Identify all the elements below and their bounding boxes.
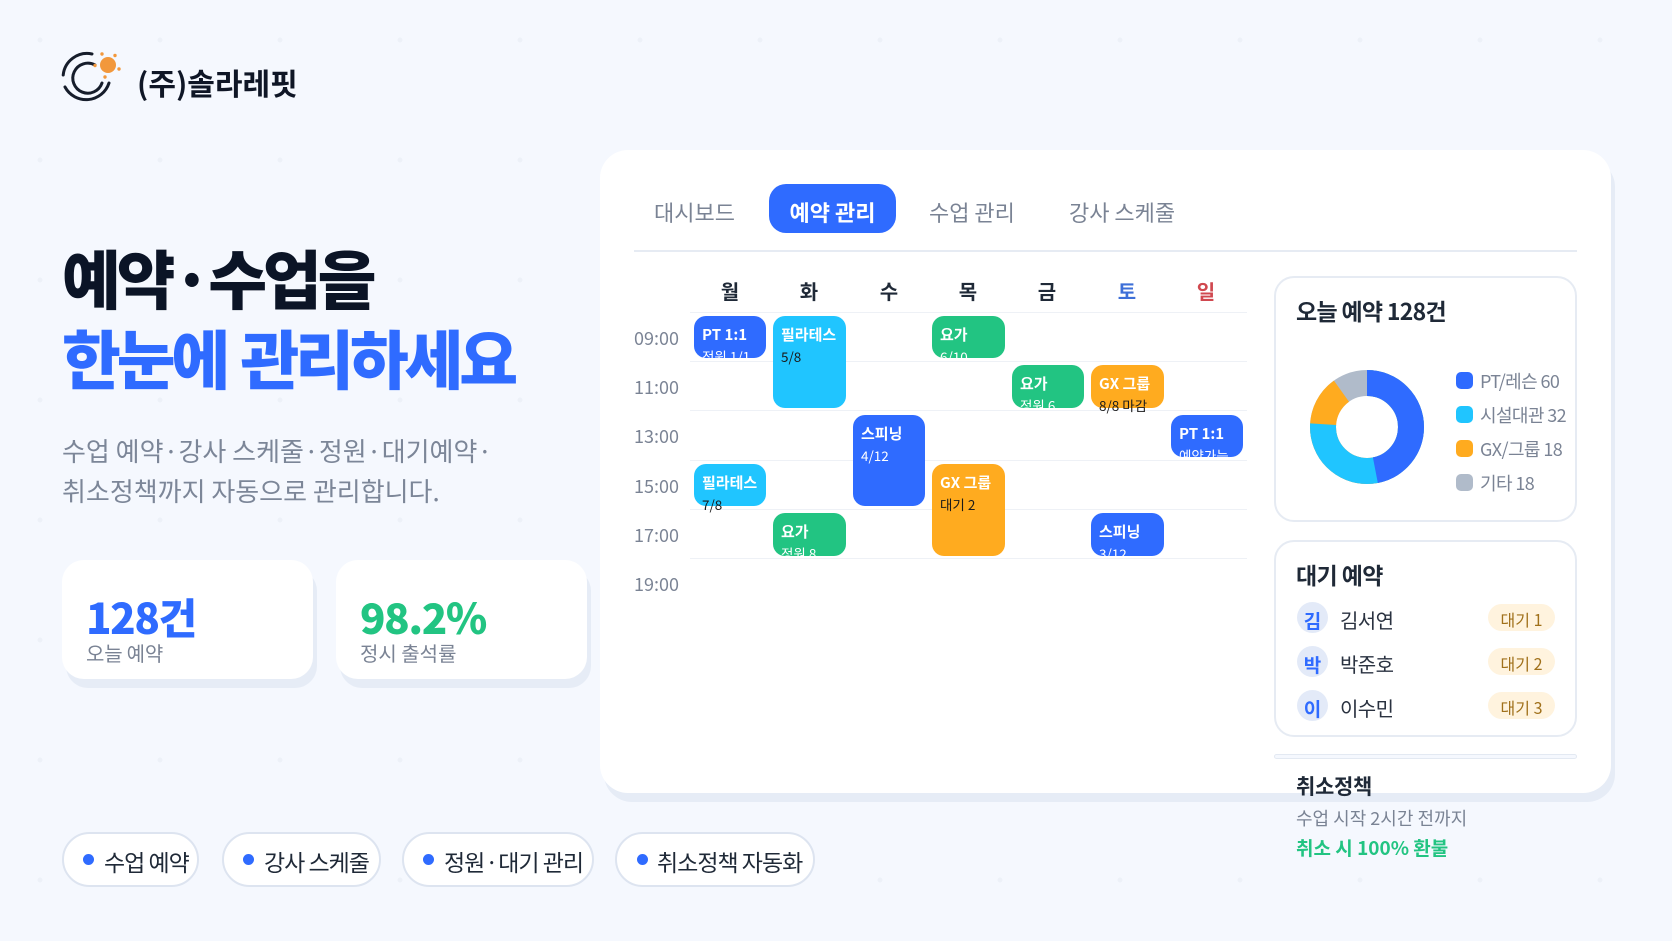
time labels bbox=[634, 325, 679, 597]
event: yoga Friday: 요가 bbox=[1020, 373, 1048, 394]
tab bar bbox=[634, 184, 1577, 252]
chip: instructor schedule: 강사 스케줄 bbox=[264, 844, 369, 878]
event: GX group Saturday: 8/8 마감 bbox=[1099, 395, 1147, 415]
headline: 예약·수업을 bbox=[62, 231, 372, 323]
weekly schedule calendar: 토 bbox=[1118, 276, 1136, 305]
event: yoga Thursday bbox=[932, 316, 1005, 358]
weekly schedule calendar bbox=[634, 276, 1247, 597]
weekly schedule calendar: 목 bbox=[959, 276, 977, 305]
logo bbox=[62, 52, 298, 104]
policy title: 취소정책 bbox=[1296, 771, 1372, 801]
weekday headers bbox=[721, 276, 1215, 305]
event: spinning Wednesday: 스피닝 bbox=[861, 423, 902, 444]
stat card: attendance bbox=[336, 560, 587, 679]
weekly schedule calendar: 화 bbox=[800, 276, 818, 305]
event: PT 1:1 Sunday bbox=[1171, 415, 1243, 457]
card title: 오늘 예약 128건 bbox=[1296, 293, 1446, 327]
waitlist row: 김서연: 김서연 bbox=[1340, 605, 1393, 634]
card: today's reservations donut bbox=[1274, 276, 1577, 522]
weekly schedule calendar: 15:00 bbox=[634, 473, 679, 499]
event: yoga Thursday: 요가 bbox=[940, 324, 968, 345]
event: GX group Saturday bbox=[1091, 365, 1164, 408]
event: pilates Monday: 필라테스 bbox=[702, 472, 757, 493]
event: pilates Tuesday: 5/8 bbox=[781, 346, 801, 366]
event: yoga Tuesday bbox=[773, 513, 846, 556]
tab: reservations active bbox=[769, 184, 896, 233]
feature chips bbox=[62, 832, 815, 887]
chip: instructor schedule bbox=[222, 832, 381, 887]
donut legend bbox=[1456, 368, 1566, 496]
weekly schedule calendar: 17:00 bbox=[634, 522, 679, 548]
event: spinning Wednesday bbox=[853, 415, 925, 506]
description: 취소정책까지 자동으로 관리합니다. bbox=[62, 472, 440, 509]
cancellation policy bbox=[1296, 771, 1467, 861]
description bbox=[62, 432, 492, 509]
donut legend: 기타 18 bbox=[1480, 470, 1534, 496]
waitlist row: 박준호: 대기 2 bbox=[1501, 651, 1542, 675]
headline bbox=[62, 231, 516, 403]
weekly schedule calendar: 월 bbox=[721, 276, 739, 305]
icon: sun and rings bbox=[62, 52, 121, 102]
weekly schedule calendar: 13:00 bbox=[634, 423, 679, 449]
weekly schedule calendar: 11:00 bbox=[634, 374, 679, 400]
waitlist row: 김서연 bbox=[1297, 602, 1555, 634]
chip: capacity and waitlist bbox=[402, 832, 594, 887]
tab: classes: 수업 관리 bbox=[929, 196, 1015, 228]
stat card: today's reservations bbox=[62, 560, 313, 679]
event: spinning Saturday: 스피닝 bbox=[1099, 521, 1140, 542]
tab: dashboard: 대시보드 bbox=[654, 196, 735, 228]
tab: instructor schedule: 강사 스케줄 bbox=[1069, 196, 1175, 228]
event: pilates Monday: 7/8 bbox=[702, 494, 722, 514]
waitlist row: 박준호: 박준호 bbox=[1340, 649, 1393, 678]
donut chart bbox=[1310, 370, 1424, 484]
event: yoga Tuesday: 요가 bbox=[781, 521, 809, 542]
weekly schedule calendar: 19:00 bbox=[634, 571, 679, 597]
weekly schedule calendar: 일 bbox=[1197, 276, 1215, 305]
chip: class booking bbox=[62, 832, 199, 887]
waitlist row: 이수민 bbox=[1297, 690, 1555, 722]
donut legend: 시설대관 32 bbox=[1480, 402, 1566, 428]
policy refund: 취소 시 100% 환불 bbox=[1296, 834, 1448, 861]
chip: class booking: 수업 예약 bbox=[104, 844, 189, 878]
donut legend: PT/레슨 60 bbox=[1480, 368, 1559, 394]
waitlist title: 대기 예약 bbox=[1296, 557, 1383, 591]
panel: dashboard bbox=[600, 150, 1611, 793]
card: waitlist bbox=[1274, 540, 1577, 737]
stat value: 98.2% bbox=[360, 586, 486, 647]
stat value: 128건 bbox=[86, 586, 196, 647]
chip: capacity and waitlist: 정원·대기 관리 bbox=[444, 844, 583, 878]
description: 수업 예약·강사 스케줄·정원·대기예약· bbox=[62, 432, 492, 469]
event: PT 1:1 Monday: PT 1:1 bbox=[702, 324, 747, 345]
event: spinning Saturday bbox=[1091, 513, 1164, 556]
event: pilates Tuesday bbox=[773, 316, 846, 408]
event: GX group Saturday: GX 그룹 bbox=[1099, 373, 1150, 394]
tab: reservations active: 예약 관리 bbox=[790, 196, 875, 228]
event: pilates Monday bbox=[694, 464, 766, 506]
waitlist row: 이수민: 이 bbox=[1304, 695, 1321, 722]
event: yoga Friday bbox=[1012, 365, 1084, 408]
waitlist row: 이수민: 이수민 bbox=[1340, 693, 1393, 722]
waitlist row: 박준호: 박 bbox=[1304, 651, 1321, 678]
stat label: 정시 출석률 bbox=[360, 638, 456, 667]
event: PT 1:1 Monday bbox=[694, 316, 766, 358]
event: GX group Thursday: GX 그룹 bbox=[940, 472, 991, 493]
weekly schedule calendar: 09:00 bbox=[634, 325, 679, 351]
event: PT 1:1 Sunday: PT 1:1 bbox=[1179, 423, 1224, 444]
company name: (주)솔라레핏 bbox=[137, 60, 298, 104]
donut legend: GX/그룹 18 bbox=[1480, 436, 1562, 462]
event: GX group Thursday bbox=[932, 464, 1005, 556]
stat label: 오늘 예약 bbox=[86, 638, 163, 667]
weekly schedule calendar: 금 bbox=[1038, 276, 1056, 305]
chip: cancellation automation bbox=[615, 832, 815, 887]
policy detail: 수업 시작 2시간 전까지 bbox=[1296, 805, 1467, 831]
waitlist row: 박준호 bbox=[1297, 646, 1555, 678]
waitlist row: 김서연: 김 bbox=[1304, 607, 1321, 634]
chip: cancellation automation: 취소정책 자동화 bbox=[657, 844, 802, 878]
event: GX group Thursday: 대기 2 bbox=[940, 494, 975, 514]
event: pilates Tuesday: 필라테스 bbox=[781, 324, 836, 345]
waitlist row: 김서연: 대기 1 bbox=[1501, 607, 1542, 631]
weekly schedule calendar: 수 bbox=[880, 276, 898, 305]
waitlist row: 이수민: 대기 3 bbox=[1501, 695, 1542, 719]
headline: 한눈에 관리하세요 bbox=[62, 311, 514, 403]
event: spinning Wednesday: 4/12 bbox=[861, 445, 889, 465]
